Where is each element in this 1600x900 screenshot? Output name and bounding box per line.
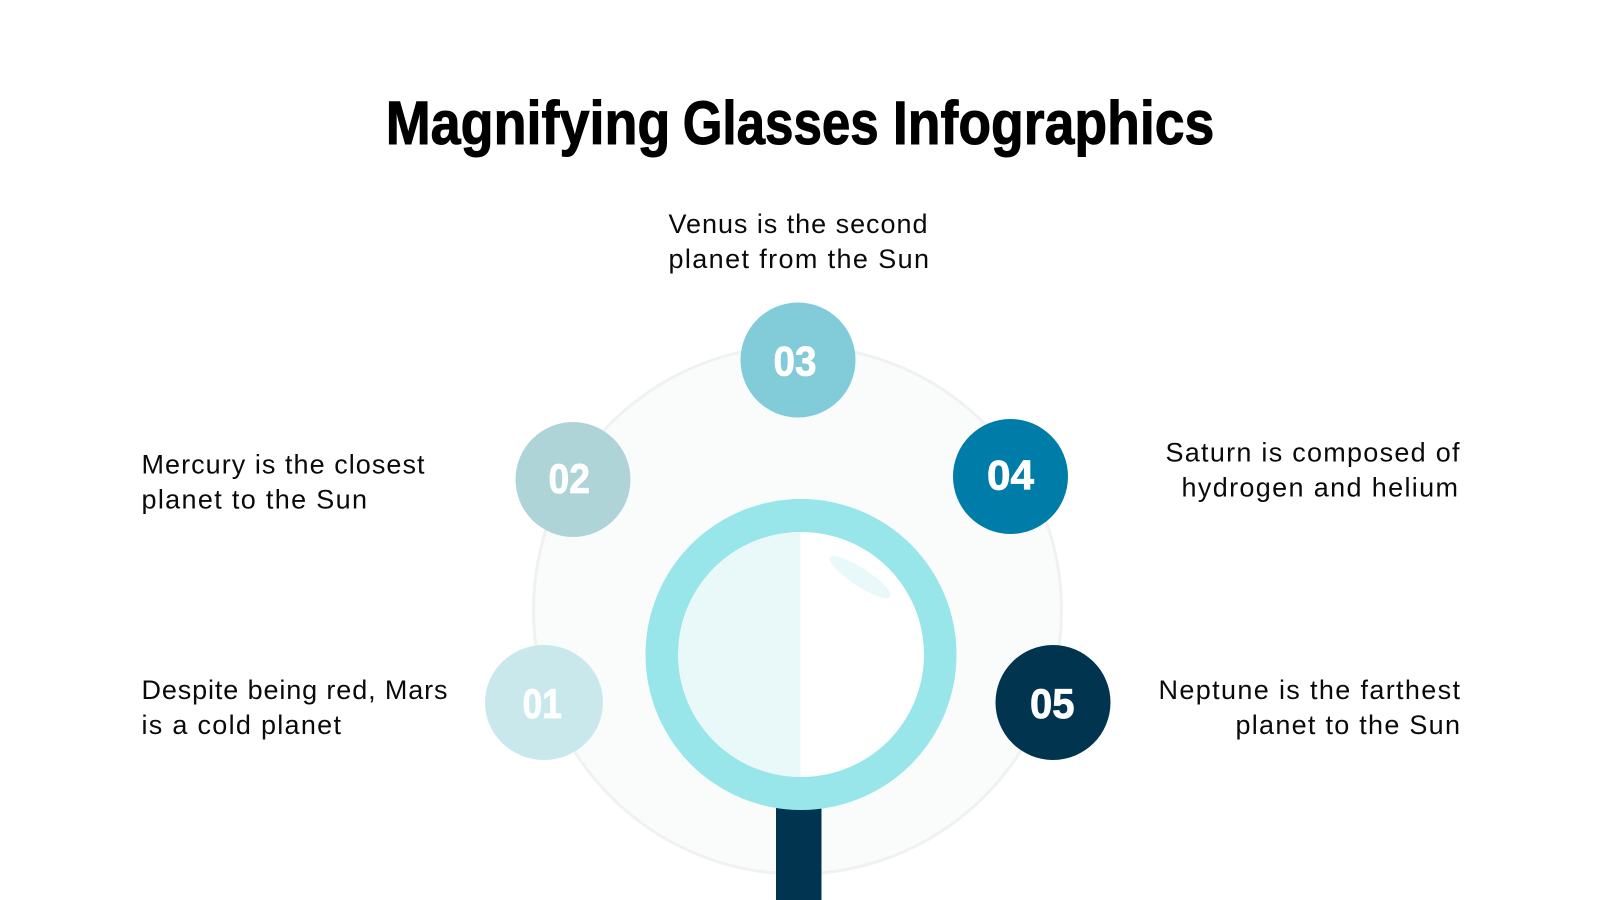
badge 02 (516, 422, 630, 537)
text Mars (142, 675, 448, 740)
handle (776, 800, 822, 900)
badge 05: 05 (1030, 680, 1074, 727)
step 01 (142, 645, 603, 760)
title: Magnifying (386, 89, 670, 157)
badge 01 (485, 645, 603, 760)
text Mercury: Mercury is the closest (142, 450, 425, 480)
rim (646, 499, 956, 810)
text Venus: Venus is the second (668, 209, 928, 239)
badge 05 (996, 645, 1110, 760)
text Venus: planet from the Sun (668, 244, 929, 274)
text Saturn: hydrogen and helium (1182, 472, 1458, 502)
badge 04 (953, 419, 1068, 534)
text Saturn: Saturn is composed of (1166, 438, 1460, 468)
badge 03 (740, 302, 856, 418)
step 05 (996, 645, 1460, 760)
badge 03: 03 (774, 338, 816, 384)
badge 02: 02 (548, 455, 590, 502)
text Neptune: planet to the Sun (1236, 710, 1460, 740)
step 03 (668, 209, 929, 418)
background circle (534, 346, 1062, 874)
text Mercury: planet to the Sun (142, 484, 367, 514)
text Saturn (1166, 438, 1460, 502)
text Venus (668, 209, 929, 274)
lens right half (679, 532, 924, 777)
title: Glasses (683, 89, 879, 157)
title (386, 89, 1214, 157)
text Neptune: Neptune is the farthest (1158, 675, 1460, 705)
step 04 (953, 419, 1460, 534)
step 02 (142, 422, 630, 537)
text Mercury (142, 450, 425, 514)
magnifying glass (646, 499, 956, 900)
badge 01: 01 (522, 680, 562, 727)
text Neptune (1158, 675, 1460, 740)
text Mars: Despite being red, Mars (142, 675, 448, 705)
badge 04: 04 (987, 452, 1035, 498)
lens left half (678, 532, 800, 777)
lens (678, 532, 924, 777)
title: Infographics (893, 89, 1214, 157)
text Mars: is a cold planet (142, 710, 341, 740)
lens highlight (825, 550, 895, 604)
